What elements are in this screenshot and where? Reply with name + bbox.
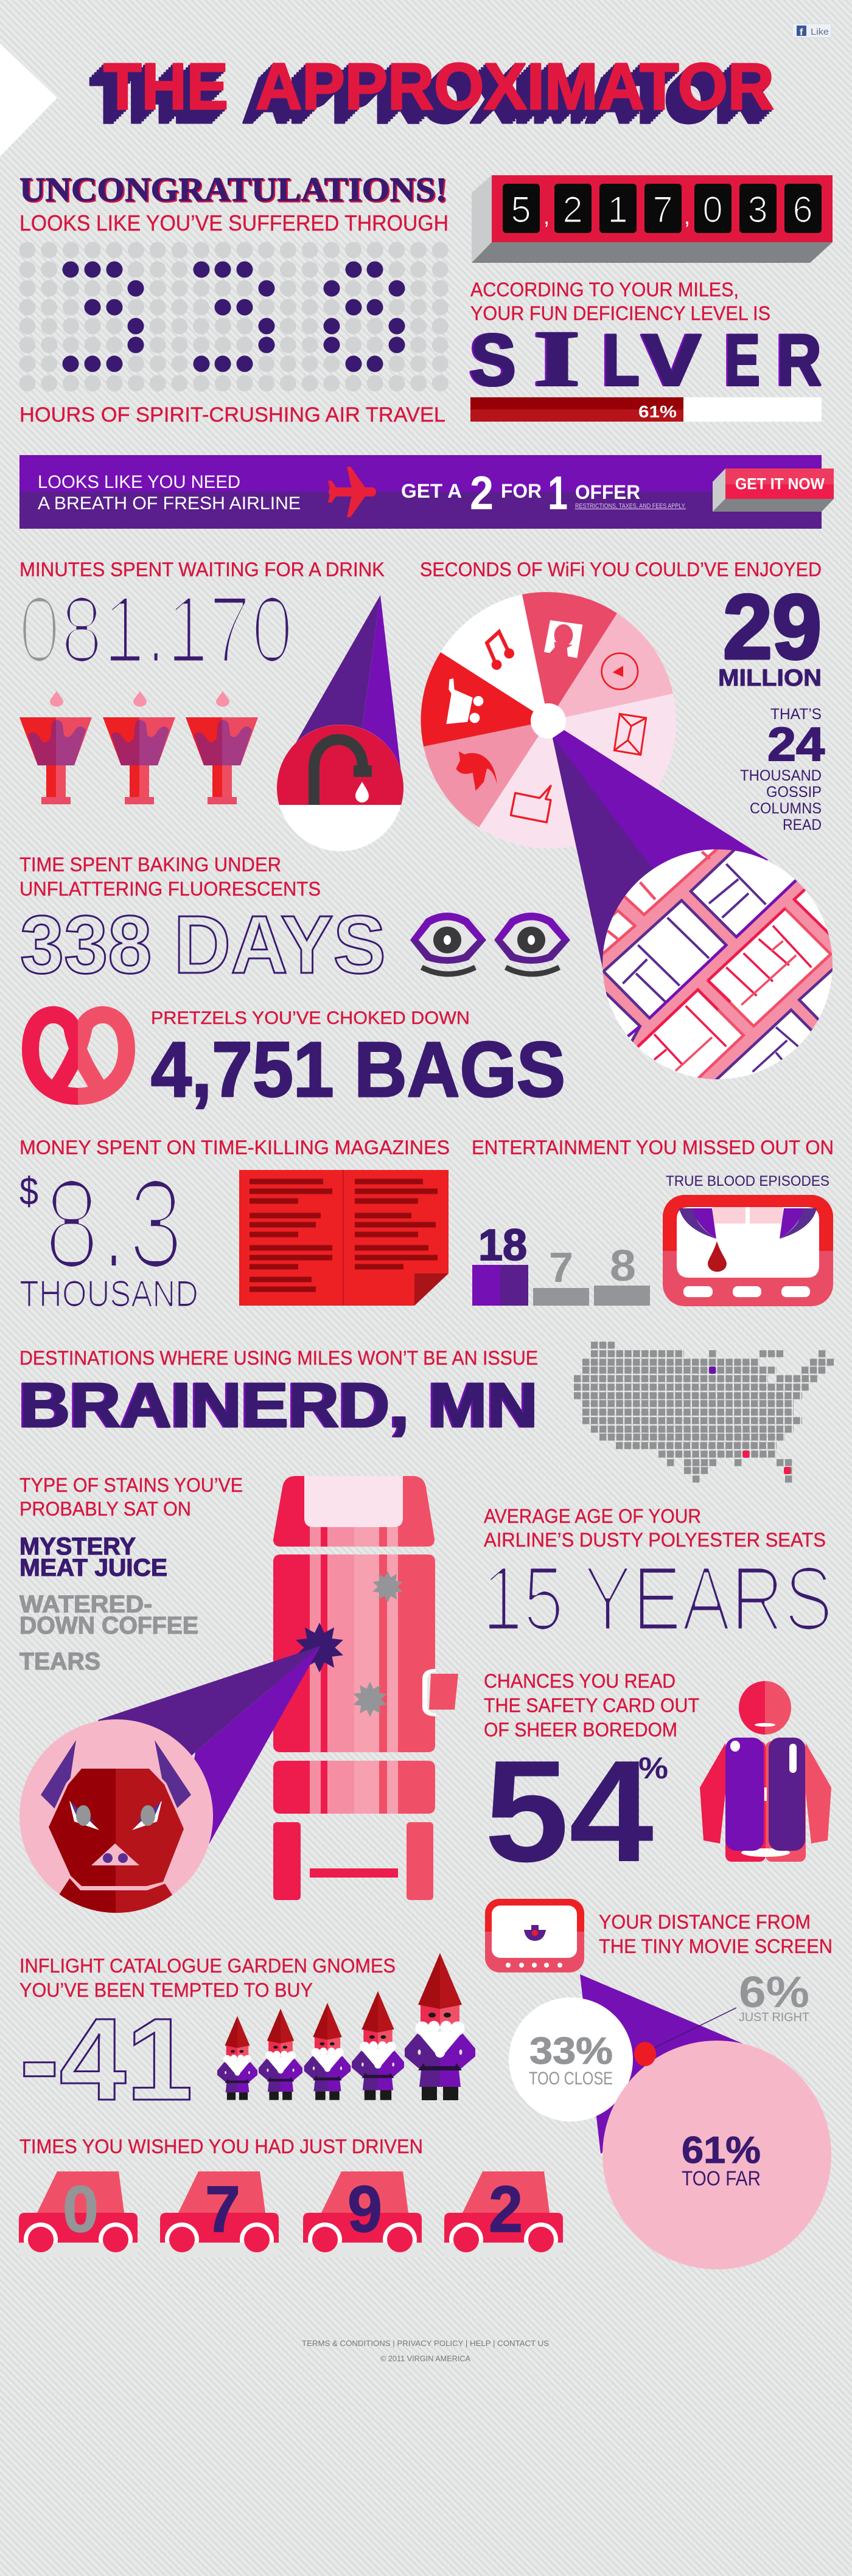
bar chart: entertainment: 7 bbox=[549, 1244, 573, 1291]
promo banner bbox=[19, 455, 834, 529]
heading: distance to screen: THE TINY MOVIE SCREEN bbox=[599, 1935, 833, 1957]
number 29 million: MILLION bbox=[718, 665, 822, 691]
silver level: E bbox=[724, 319, 758, 401]
heading: seconds of wifi: SECONDS OF WiFi YOU COULD’VE ENJOYED bbox=[420, 559, 822, 580]
heading: entertainment: ENTERTAINMENT YOU MISSED OUT ON bbox=[472, 1137, 834, 1158]
cars with digits 0792: 2 bbox=[489, 2172, 523, 2246]
heading: pretzels: PRETZELS YOU’VE CHOKED DOWN bbox=[151, 1008, 470, 1028]
illustration: city map bbox=[602, 849, 833, 1079]
title: THE bbox=[92, 61, 217, 134]
number 081,170: 081,170 bbox=[18, 577, 293, 682]
text: 24 thousand gossip columns read: THOUSAND bbox=[740, 767, 822, 784]
bubble: 6% just right bbox=[634, 1968, 809, 2066]
destination: brainerd: BRAINERD, MN bbox=[19, 1370, 538, 1440]
cars with digits 0792: 9 bbox=[347, 2172, 382, 2246]
number: $8.3 thousand: $ bbox=[19, 1169, 38, 1213]
title: THE bbox=[102, 51, 226, 125]
miles counter: 1 bbox=[607, 189, 628, 230]
chart: distance bubbles bbox=[509, 1968, 831, 2269]
text: according to your miles: YOUR FUN DEFICIENCY LEVEL IS bbox=[470, 302, 770, 324]
title: APPROXIMATOR bbox=[254, 51, 772, 125]
cars with digits 0792: 0 bbox=[63, 2172, 99, 2246]
cars with digits 0792: 7 bbox=[205, 2172, 240, 2246]
miles counter bbox=[472, 175, 833, 263]
bar chart: entertainment: 18 bbox=[478, 1221, 527, 1270]
label: true blood episodes: TRUE BLOOD EPISODES bbox=[666, 1173, 829, 1189]
icon: tv with vampire bbox=[663, 1195, 833, 1306]
miles counter: 6 bbox=[792, 189, 813, 230]
heading: gnomes: YOU’VE BEEN TEMPTED TO BUY bbox=[19, 1979, 313, 2001]
number: $8.3 thousand: THOUSAND bbox=[19, 1273, 198, 1314]
stain list: MYSTERY bbox=[19, 1533, 136, 1560]
title: THE bbox=[97, 56, 222, 130]
miles counter: 2 bbox=[562, 189, 583, 230]
facebook like button: Like bbox=[811, 27, 829, 37]
chart: dot map of usa bbox=[574, 1345, 835, 1479]
bubble: 61% too far bbox=[602, 2041, 831, 2269]
caption: hours of air travel: HOURS OF SPIRIT-CRUSHING AIR TRAVEL bbox=[19, 403, 445, 426]
heading: time baking bbox=[19, 854, 321, 900]
heading: time baking: TIME SPENT BAKING UNDER bbox=[19, 854, 281, 875]
bar chart: entertainment: 8 bbox=[610, 1242, 636, 1290]
heading: distance to screen bbox=[599, 1911, 833, 1957]
number: 4,751 bags: 4,751 BAGS bbox=[151, 1026, 565, 1113]
title: THE bbox=[94, 58, 219, 132]
chart: wifi wheel bbox=[421, 592, 676, 848]
silver level: S bbox=[470, 319, 516, 401]
stain list: DOWN COFFEE bbox=[19, 1612, 198, 1639]
text: 24 thousand gossip columns read: COLUMNS bbox=[750, 800, 822, 817]
promo banner: 1 bbox=[548, 466, 568, 520]
heading: seat age: AVERAGE AGE OF YOUR bbox=[484, 1505, 701, 1527]
silver level: L bbox=[601, 319, 638, 401]
heading: seat age bbox=[484, 1505, 826, 1551]
facebook like button: f bbox=[800, 27, 803, 38]
silver level: I bbox=[533, 315, 578, 403]
miles counter: , bbox=[543, 204, 550, 229]
subheading: suffered through: LOOKS LIKE YOU’VE SUFFERED THROUGH bbox=[19, 211, 449, 235]
footer links: TERMS & CONDITIONS | PRIVACY POLICY | HELP | CONTACT US bbox=[302, 2339, 549, 2348]
icon: plane bbox=[328, 467, 376, 517]
icon: magazine bbox=[239, 1170, 449, 1306]
miles counter: , bbox=[684, 204, 690, 229]
title: APPROXIMATOR bbox=[244, 61, 763, 134]
silver level bbox=[469, 315, 822, 403]
text: 24 thousand gossip columns read bbox=[740, 706, 825, 834]
facebook like button bbox=[792, 24, 831, 38]
silver level: S bbox=[469, 319, 514, 401]
title: THE bbox=[99, 54, 224, 127]
title: THE bbox=[103, 49, 228, 123]
copyright: © 2011 VIRGIN AMERICA bbox=[380, 2354, 470, 2363]
heading: time baking: UNFLATTERING FLUORESCENTS bbox=[19, 878, 321, 900]
heading: uncongratulations: UNCONGRATULATIONS! bbox=[19, 171, 447, 209]
seat stains bbox=[296, 1571, 403, 1717]
heading: stains bbox=[19, 1474, 243, 1520]
number 29 million: 29 bbox=[723, 576, 822, 678]
heading: gnomes: INFLIGHT CATALOGUE GARDEN GNOMES bbox=[19, 1955, 396, 1977]
promo banner: RESTRICTIONS, TAXES, AND FEES APPLY. bbox=[575, 503, 686, 510]
bubble: 33% too close bbox=[509, 1997, 633, 2122]
miles counter: 5 bbox=[511, 189, 531, 230]
bubble: 6% just right: JUST RIGHT bbox=[739, 2011, 809, 2024]
heading: stains: PROBABLY SAT ON bbox=[19, 1498, 191, 1520]
silver level: V bbox=[641, 319, 699, 401]
number: $8.3 thousand: 8.3 bbox=[44, 1154, 184, 1295]
title: APPROXIMATOR bbox=[251, 54, 770, 127]
number: 338 days: 338 DAYS bbox=[20, 899, 386, 990]
progress bar 61%: 61% bbox=[638, 402, 677, 421]
bubble: 33% too close: TOO CLOSE bbox=[529, 2069, 613, 2089]
title bbox=[89, 49, 774, 137]
seat legs bbox=[273, 1822, 433, 1900]
heading: stains: TYPE OF STAINS YOU’VE bbox=[19, 1474, 243, 1496]
number: $8.3 thousand bbox=[19, 1154, 198, 1314]
bubble: 33% too close: 33% bbox=[529, 2030, 613, 2072]
stain list: WATERED- bbox=[19, 1591, 152, 1618]
stain list: TEARS bbox=[19, 1648, 100, 1675]
heading: distance to screen: YOUR DISTANCE FROM bbox=[599, 1911, 811, 1933]
heading: safety card: CHANCES YOU READ bbox=[484, 1670, 676, 1692]
heading: money on magazines: MONEY SPENT ON TIME-KILLING MAGAZINES bbox=[19, 1137, 450, 1158]
text: 24 thousand gossip columns read: GOSSIP bbox=[766, 784, 822, 801]
icon: three drinks bbox=[19, 691, 258, 804]
cars with digits 0792 bbox=[19, 2171, 563, 2257]
silver level: R bbox=[777, 319, 822, 401]
text: according to your miles bbox=[470, 279, 770, 324]
map markers bbox=[709, 1366, 791, 1474]
number: 54 percent: 54 bbox=[484, 1731, 654, 1892]
destination: brainerd: BRAINERD, MN bbox=[18, 1370, 536, 1440]
title: APPROXIMATOR bbox=[242, 63, 760, 137]
stain list: MEAT JUICE bbox=[19, 1554, 167, 1581]
promo banner: GET A bbox=[401, 480, 462, 502]
illustration: pig bbox=[19, 1719, 213, 1923]
heading: seat age: AIRLINE’S DUSTY POLYESTER SEATS bbox=[484, 1529, 826, 1551]
spotlight cone to pig bbox=[98, 1646, 321, 1843]
illustration: passenger in life vest bbox=[700, 1681, 831, 1862]
title: THE bbox=[89, 63, 214, 137]
wheel icons bbox=[446, 620, 646, 823]
text: 24 thousand gossip columns read: READ bbox=[783, 816, 822, 834]
bubble: 61% too far: TOO FAR bbox=[682, 2167, 761, 2190]
heading: wished you had driven: TIMES YOU WISHED YOU HAD JUST DRIVEN bbox=[19, 2136, 423, 2157]
bubble: 61% too far: 61% bbox=[682, 2129, 761, 2171]
white arrow bbox=[0, 43, 57, 156]
title: APPROXIMATOR bbox=[249, 56, 767, 130]
silver level: R bbox=[775, 319, 822, 401]
icon: eyes bbox=[410, 913, 570, 974]
number: minus 41: -41 bbox=[19, 1994, 193, 2125]
heading: gnomes bbox=[19, 1955, 396, 2001]
button: get it now bbox=[713, 468, 834, 512]
text: according to your miles: ACCORDING TO YOUR MILES, bbox=[470, 279, 739, 301]
seat back bbox=[273, 1554, 435, 1752]
title: APPROXIMATOR bbox=[246, 58, 765, 132]
stain list bbox=[19, 1533, 198, 1675]
icon: pretzel bbox=[30, 1015, 127, 1096]
heading: uncongratulations: UNCONGRATULATIONS! bbox=[21, 172, 449, 210]
promo banner: OFFER bbox=[575, 481, 640, 503]
seat armrest bbox=[422, 1669, 458, 1716]
illustration: airline seat bbox=[273, 1476, 458, 1900]
silver level: L bbox=[603, 319, 640, 401]
promo banner: A BREATH OF FRESH AIRLINE bbox=[38, 493, 301, 513]
icon: row of gnomes bbox=[217, 1953, 475, 2100]
silver level: V bbox=[643, 319, 701, 401]
miles counter: 0 bbox=[702, 189, 723, 230]
number: 54 percent: % bbox=[638, 1751, 668, 1785]
icon: faucet spotlight bbox=[277, 595, 403, 851]
promo banner: 2 bbox=[470, 466, 494, 520]
text: 24 thousand gossip columns read: 24 bbox=[767, 717, 825, 771]
button: get it now: GET IT NOW bbox=[735, 475, 825, 493]
miles counter: 3 bbox=[747, 189, 768, 230]
seat bottom bbox=[273, 1761, 435, 1814]
spotlight cone bbox=[580, 1974, 752, 2154]
silver level: I bbox=[535, 315, 580, 403]
seat headrest bbox=[273, 1476, 435, 1547]
heading: destinations: DESTINATIONS WHERE USING MILES WON’T BE AN ISSUE bbox=[19, 1347, 538, 1369]
dot matrix number 338 bbox=[27, 250, 444, 383]
icon: small tv bbox=[485, 1899, 584, 1972]
spotlight cone to map bbox=[553, 730, 768, 986]
bubble: 6% just right: 6% bbox=[739, 1968, 809, 2017]
heading: minutes waiting: MINUTES SPENT WAITING FOR A DRINK bbox=[19, 559, 385, 580]
bar chart: entertainment bbox=[472, 1221, 650, 1306]
heading: safety card: OF SHEER BOREDOM bbox=[484, 1719, 677, 1741]
heading: safety card bbox=[484, 1670, 699, 1741]
promo banner: LOOKS LIKE YOU NEED bbox=[38, 472, 240, 492]
text: 24 thousand gossip columns read: THAT’S bbox=[770, 706, 822, 723]
title: APPROXIMATOR bbox=[256, 49, 774, 123]
silver level: E bbox=[725, 319, 760, 401]
promo banner: FOR bbox=[501, 480, 542, 502]
miles counter: 7 bbox=[652, 189, 673, 230]
progress bar 61% bbox=[470, 397, 822, 422]
heading: safety card: THE SAFETY CARD OUT bbox=[484, 1694, 699, 1716]
